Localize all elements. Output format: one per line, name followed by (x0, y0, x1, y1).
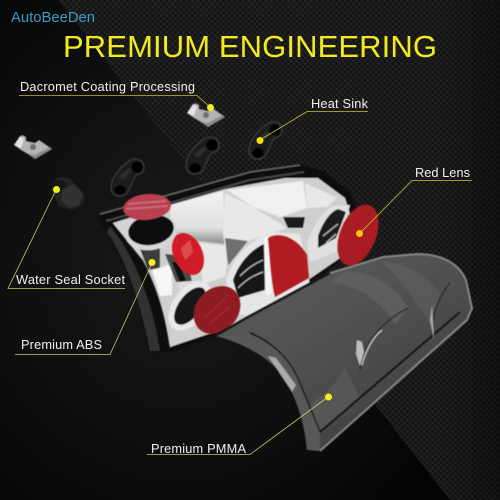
callout: Premium PMMA: Premium PMMA (151, 441, 246, 456)
red lens: mid stripe (268, 235, 309, 297)
white reflector panel right (305, 183, 337, 208)
callout: Dacromet Coating Processing: Dacromet Coating Processing (20, 79, 195, 94)
callout: Premium ABS (15, 259, 156, 354)
white reflector panel centre (223, 193, 287, 268)
white reflector panel left (170, 191, 226, 244)
tail light housing (96, 164, 358, 353)
icon: metal clip right (187, 103, 225, 127)
callout: Red Lens: Red Lens (415, 165, 470, 180)
smoked PMMA lens cover (215, 254, 472, 451)
callout: Dacromet Coating Processing (19, 79, 214, 111)
red lens: lower (184, 277, 250, 343)
red lens: top left (122, 192, 172, 222)
chrome left corner (113, 214, 170, 260)
callout: Red Lens (356, 165, 472, 237)
callout: Premium ABS: Premium ABS (21, 337, 102, 352)
red lens: bright (166, 228, 210, 280)
callout: Heat Sink (256, 96, 369, 144)
cover outer shell (216, 254, 472, 451)
top socket hole (122, 210, 180, 254)
icon: black bracket centre (111, 159, 144, 196)
socket: lower left (160, 273, 220, 339)
icon: metal clip left (14, 135, 52, 159)
callout: Heat Sink: Heat Sink (311, 96, 369, 111)
cover ribs (360, 308, 408, 370)
title: PREMIUM ENGINEERING (63, 29, 437, 64)
white reflector panel top (227, 181, 307, 217)
callout: Water Seal Socket: Water Seal Socket (16, 272, 125, 287)
cover left edge panel (216, 334, 320, 451)
icon: water seal socket plug (52, 177, 85, 209)
callout: Premium PMMA (147, 394, 332, 456)
icon: black bracket upper (186, 137, 219, 174)
icon: heat sink bracket (249, 122, 282, 159)
callout: Water Seal Socket (8, 186, 125, 288)
cover soft shading (330, 272, 408, 325)
socket: centre (226, 232, 310, 318)
socket: right (307, 205, 350, 262)
logo: AutoBeeDen (11, 9, 95, 26)
cover rim highlight (250, 254, 472, 451)
red lens: right (329, 199, 387, 271)
chrome body (113, 178, 352, 347)
cover inner dark edge (250, 312, 460, 432)
housing dark rim (96, 164, 358, 353)
